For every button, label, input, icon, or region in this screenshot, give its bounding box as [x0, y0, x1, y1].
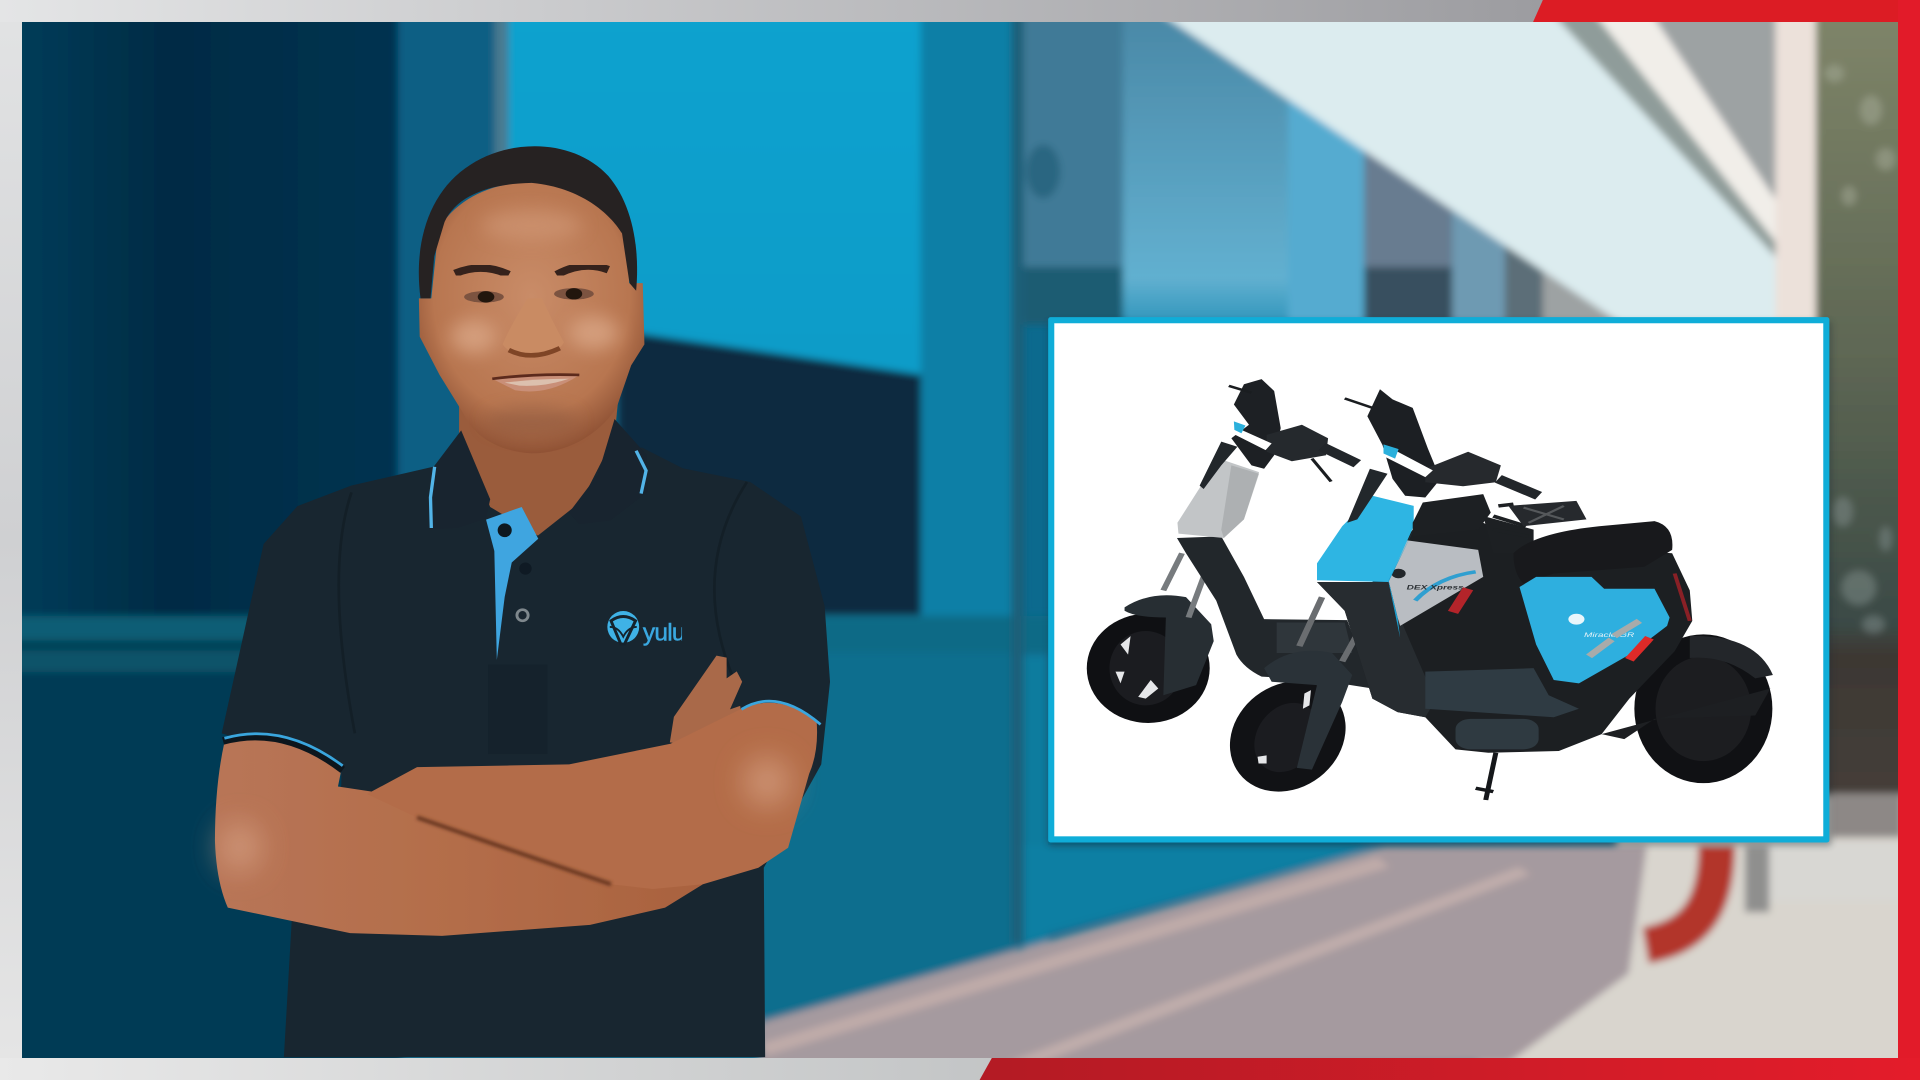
scooters: [1087, 379, 1773, 800]
face shading: [451, 210, 619, 434]
back scooter frame: [1177, 536, 1372, 688]
nose: [503, 298, 564, 358]
back scooter wheel: [1087, 613, 1210, 723]
folded arms: [215, 656, 817, 936]
front handlebars: [1345, 389, 1539, 497]
yulu logo on shirt: [607, 611, 685, 646]
blue front panel: [1317, 469, 1414, 638]
smile: [492, 374, 579, 391]
person: body: [215, 448, 830, 1057]
rear wheel: [1634, 634, 1773, 783]
main frame: [1317, 523, 1692, 753]
back scooter grey panel: [1177, 460, 1259, 538]
collar: [430, 419, 648, 529]
person: head and collar: [419, 146, 648, 660]
seats and rack: [1413, 494, 1672, 584]
footboard: [1425, 668, 1579, 717]
black polo shirt: [222, 448, 830, 1057]
back scooter handlebars: [1231, 379, 1281, 469]
front wheel: [1215, 674, 1360, 799]
blue placket with buttons: [486, 507, 538, 660]
sleeve cuffs: [223, 701, 821, 770]
blue rear panel: Miracle GR: [1584, 631, 1634, 639]
blue rear panel: [1519, 577, 1670, 683]
yulu logo on shirt: yulu: [643, 619, 685, 646]
eyebrows: [455, 266, 608, 275]
eyes: [464, 288, 594, 303]
hair: [419, 146, 637, 298]
grey side panel: [1389, 540, 1483, 626]
blue front scooter: [1215, 389, 1773, 800]
grey side panel: DEX Xpress: [1407, 583, 1464, 591]
frame: red accent border: [980, 0, 1920, 1080]
kickstand: [1476, 753, 1496, 800]
neck: [459, 394, 619, 536]
face: [419, 183, 644, 453]
scooter card: [1048, 317, 1832, 846]
grey back scooter: [1087, 379, 1372, 723]
